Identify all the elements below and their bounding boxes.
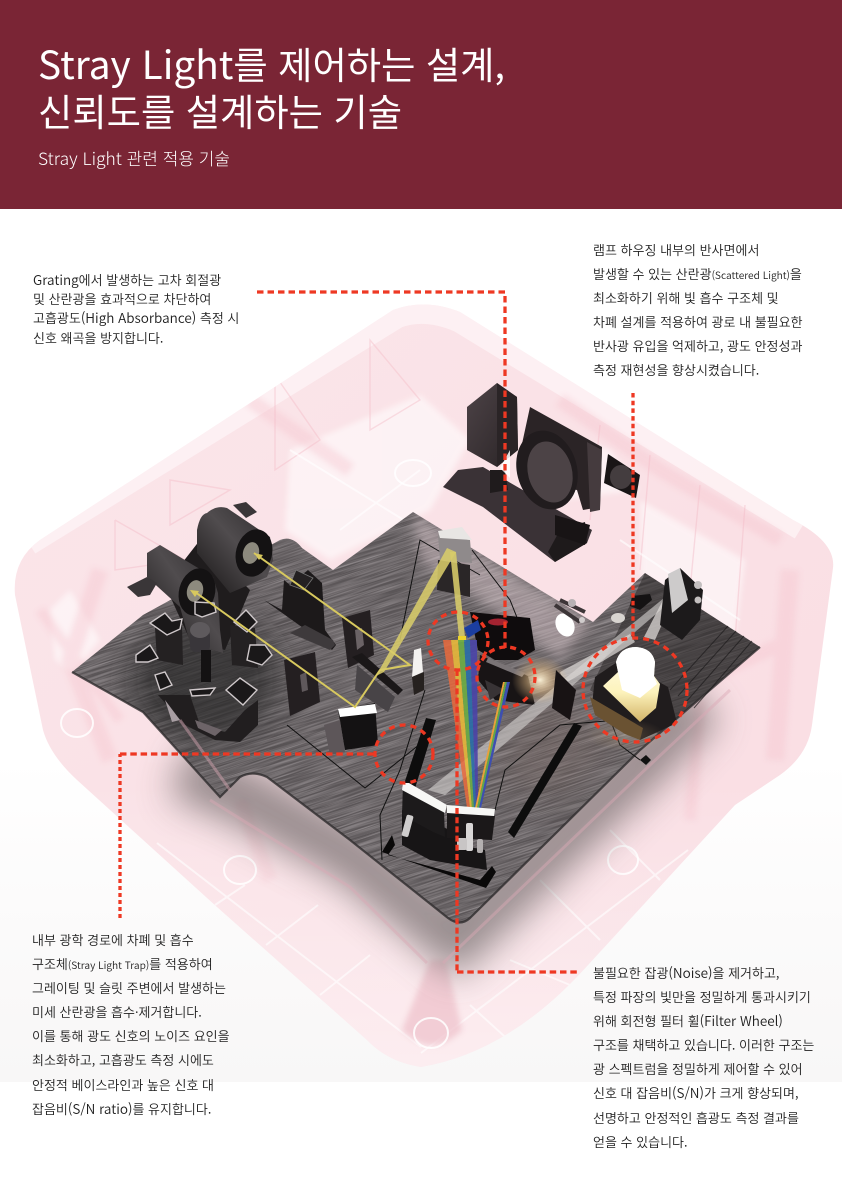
- text block: grating callout: 및 산란광을 효과적으로 차단하여: [33, 289, 211, 308]
- secondary rainbow spectrum: [475, 682, 505, 808]
- circle: filter wheel area: [477, 647, 535, 707]
- housing: gusset ribs: [115, 340, 745, 640]
- text block: filter wheel callout: 불필요한 잡광(Noise)을 제거하고,: [593, 962, 779, 982]
- text block: filter wheel callout: 신호 대 잡음비(S/N)가 크게 향상되며,: [593, 1082, 798, 1102]
- text block: stray light trap callout: 미세 산란광을 흡수·제거합니다.: [32, 1002, 202, 1021]
- housing: pale rim band: [30, 314, 800, 545]
- leader: stray light trap horizontal: [120, 752, 375, 756]
- housing: mounting bosses: [61, 460, 638, 1048]
- housing: lower white fade: [274, 950, 600, 1067]
- text block: filter wheel callout: 위해 회전형 필터 휠(Filter Wheel): [593, 1010, 783, 1030]
- right mirror: [447, 812, 495, 840]
- housing: pale window panels: [50, 395, 745, 672]
- filter ring posts: [136, 602, 272, 705]
- product cutaway illustration: [14, 290, 834, 1067]
- small white mirror: [412, 648, 423, 677]
- grating wheel housing: [517, 407, 602, 510]
- text block: filter wheel callout: 광 스펙트럼을 정밀하게 제어할 수 있어: [593, 1059, 803, 1078]
- text block: lamp housing callout: 최소화하기 위해 빛 흡수 구조체 및: [593, 288, 779, 307]
- lamp box: [467, 383, 518, 467]
- bottom mirrors: [382, 783, 496, 888]
- text block: filter wheel callout: 특정 파장의 빛만을 정밀하게 통과시키기: [593, 987, 811, 1006]
- leader: filter wheel vertical: [455, 670, 459, 972]
- leader: grating callout: [257, 292, 505, 648]
- text block: stray light trap callout: 최소화하고, 고흡광도 측정 시에도: [32, 1050, 214, 1069]
- housing: front foot: [402, 960, 462, 1045]
- title: Stray Light를 제어하는 설계,: [38, 35, 505, 91]
- light beams: [190, 548, 672, 808]
- plate black slot: [508, 723, 582, 838]
- circle: grating area: [428, 612, 488, 670]
- right lens module: [630, 568, 703, 640]
- text block: lamp housing callout: 램프 하우징 내부의 반사면에서: [593, 240, 759, 259]
- module base shelf: [443, 467, 592, 562]
- text block: stray light trap callout: [32, 930, 230, 1118]
- shadow beneath base plate: [180, 700, 700, 940]
- folding mirror on post: [437, 527, 472, 597]
- text block: lamp housing callout: 반사광 유입을 억제하고, 광도 안정성과: [593, 336, 802, 355]
- central dark optics: [464, 612, 535, 705]
- text block: stray light trap callout: 안정적 베이스라인과 높은 신호 대: [32, 1075, 214, 1094]
- text block: filter wheel callout: 얻을 수 있습니다.: [593, 1132, 688, 1151]
- text block: lamp housing callout: 차폐 설계를 적용하여 광로 내 불필요한: [593, 312, 803, 331]
- title: [38, 35, 505, 136]
- rear grating and fan module: [443, 383, 640, 562]
- collimating mirror with screws: [552, 599, 585, 640]
- plate front edge: [72, 647, 760, 922]
- housing: pink reinforcing bands: [40, 400, 790, 880]
- text block: grating callout: 고흡광도(High Absorbance) 측정 시: [33, 307, 239, 327]
- left mirror: [402, 783, 447, 837]
- circle: stray light trap area: [375, 725, 433, 783]
- front housing tube reflections: [180, 690, 730, 963]
- text block: grating callout: 신호 왜곡을 방지합니다.: [33, 328, 163, 347]
- V block holder: [264, 570, 336, 650]
- yellow thick beams: [376, 548, 456, 676]
- text block: lamp housing callout: [593, 240, 803, 379]
- leader: lamp callout: [631, 393, 635, 638]
- leader: stray light trap vertical: [118, 754, 122, 918]
- title: 신뢰도를 설계하는 기술: [38, 82, 402, 136]
- small fan: [604, 454, 640, 498]
- circle: lamp housing area: [583, 638, 687, 742]
- text block: grating callout: [33, 269, 239, 347]
- main rainbow spectrum: [443, 640, 470, 808]
- base plate: [72, 512, 761, 924]
- faint backdrop tone: [0, 760, 842, 1082]
- front cylinder: [147, 545, 223, 653]
- backing between cylinders: [165, 540, 250, 650]
- text block: lamp housing callout: 측정 재현성을 향상시켰습니다.: [593, 360, 759, 379]
- text block: lamp housing callout: 발생할 수 있는 산란광(Scattered Light)을: [593, 264, 802, 283]
- text block: stray light trap callout: 잡음비(S/N ratio)를 유지합니다.: [32, 1098, 211, 1118]
- yellow triangle thin: [195, 553, 410, 707]
- back cylinder: [197, 507, 273, 593]
- slit plate front: [284, 652, 320, 716]
- subtitle: Stray Light 관련 적용 기술: [38, 145, 230, 171]
- slit plate back: [342, 610, 374, 668]
- center knob: [190, 630, 210, 652]
- blue filter block: [464, 620, 481, 638]
- text block: stray light trap callout: 내부 광학 경로에 차폐 및 흡수: [32, 930, 194, 949]
- filter ring lower holders: [158, 622, 258, 742]
- leader: filter wheel horizontal: [457, 970, 580, 974]
- grating: [352, 653, 403, 695]
- text block: filter wheel callout: 구조를 채택하고 있습니다. 이러한 구조는: [593, 1035, 814, 1054]
- plate: dark filter ring zone: [130, 615, 280, 745]
- housing: translucent pink shell: [0, 304, 842, 1070]
- plate: pale upper zone: [413, 512, 593, 660]
- white beams: [428, 598, 670, 795]
- plate engraved outlines: [287, 540, 640, 860]
- lamp with glow: [512, 647, 677, 751]
- text block: stray light trap callout: 구조체(Stray Light Trap)를 적용하여: [32, 954, 213, 973]
- text block: filter wheel callout: [593, 962, 814, 1151]
- mirror base: [382, 835, 496, 888]
- plate grooves near lamp: [670, 626, 752, 708]
- module lower supports: [490, 470, 508, 493]
- white-top mirror: [338, 703, 378, 750]
- text block: grating callout: Grating에서 발생하는 고차 회절광: [33, 269, 221, 289]
- header band: [0, 0, 842, 209]
- red callout leader lines and circles: [120, 292, 687, 972]
- screws: [401, 814, 414, 837]
- text block: stray light trap callout: 그레이팅 및 슬릿 주변에서 발생하는: [32, 978, 226, 997]
- text block: filter wheel callout: 선명하고 안정적인 흡광도 측정 결과를: [593, 1108, 799, 1127]
- red filter: [488, 618, 508, 626]
- housing: lower wall white grid lines: [157, 450, 740, 1055]
- twin lamp cylinders: [127, 502, 278, 653]
- text block: stray light trap callout: 이를 통해 광도 신호의 노이즈 요인을: [32, 1026, 230, 1045]
- slit holders and grating: [264, 570, 424, 755]
- plate: dark lamp bay: [590, 573, 760, 735]
